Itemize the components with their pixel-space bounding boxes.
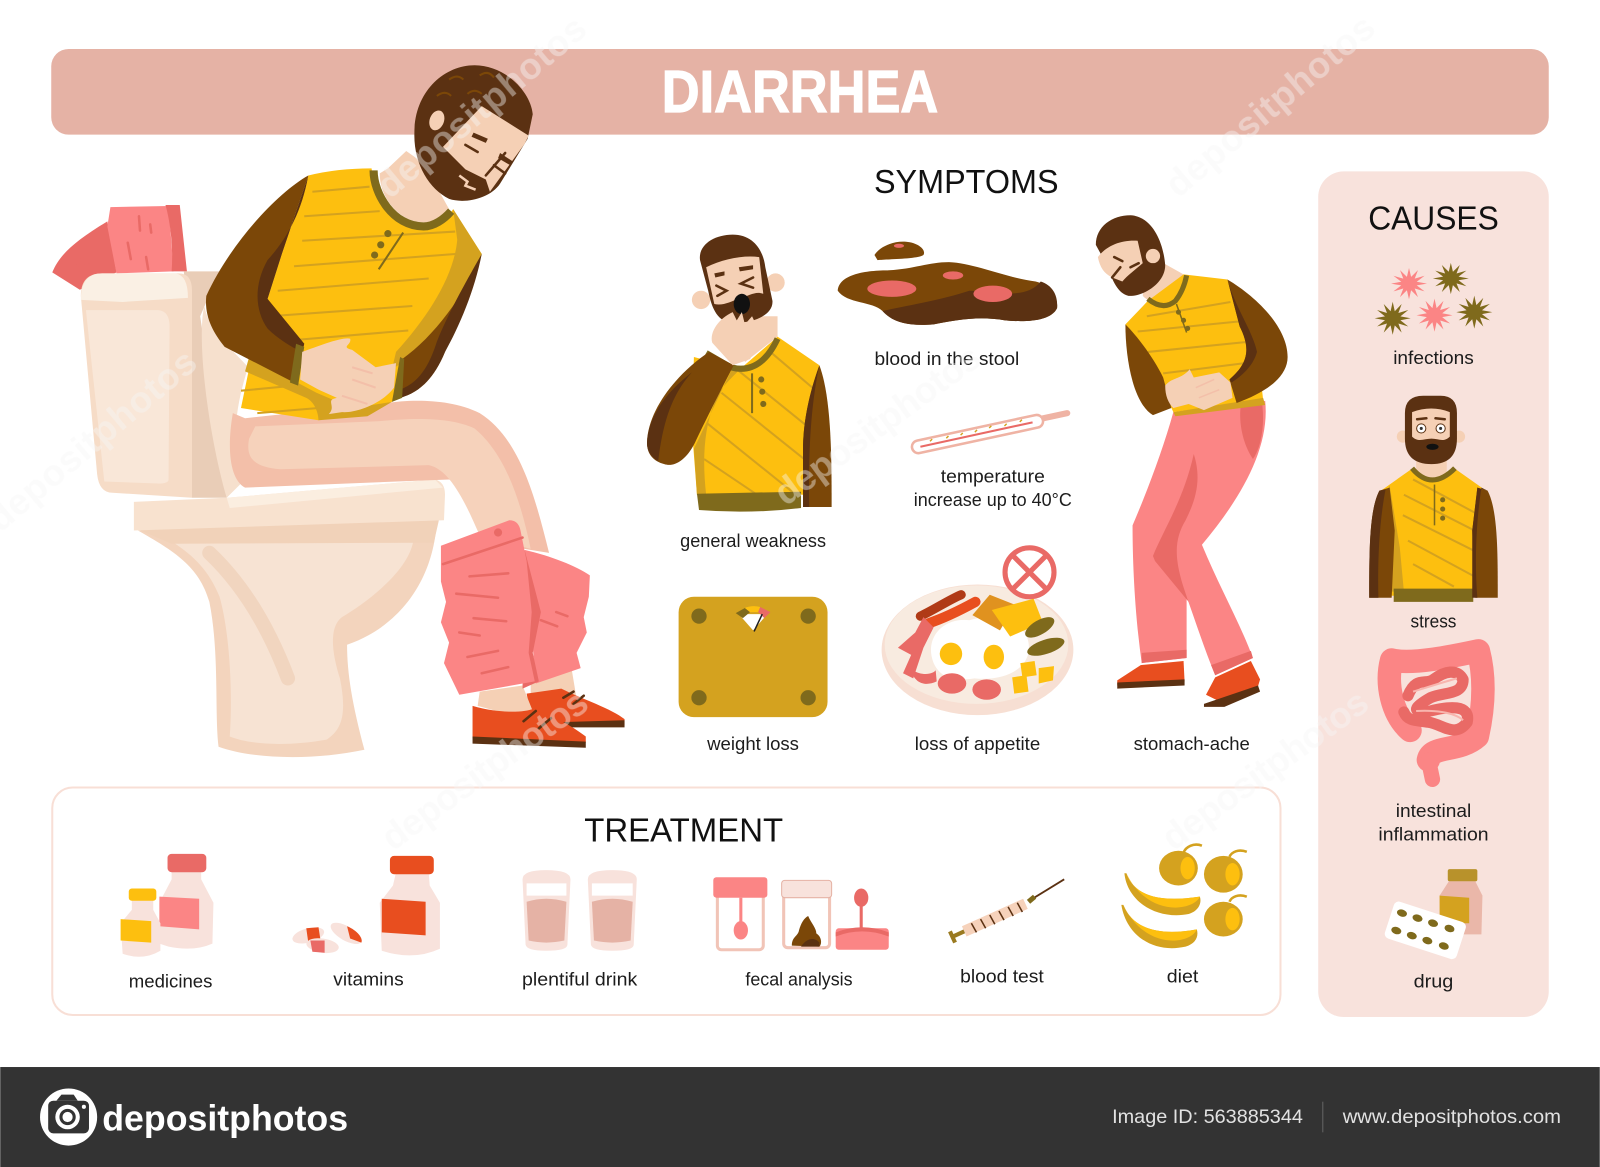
website: www.depositphotos.com [1342,1106,1561,1128]
label: infections: infections [1393,347,1474,368]
head [414,65,533,201]
title banner [51,49,1549,135]
heading: treatment: TREATMENT [584,813,783,850]
symptom: blood in the stool [838,242,1057,369]
torso with shirt [206,151,482,420]
brand name: depositphotos [102,1098,348,1138]
panel: causes [1318,171,1549,1017]
symptom: stomach-ache [1096,215,1288,754]
right sleeve [400,254,482,398]
stool icon [838,242,1057,325]
watermarks [0,6,1383,858]
icon: plentiful drink [523,870,637,951]
label: blood in the stool [874,348,1019,369]
illustration: man sitting on toilet [52,65,625,757]
watermarks: depositphotos [766,336,988,513]
watermarks: depositphotos [1154,681,1376,858]
title: DIARRHEA [662,58,938,125]
label: general weakness [680,530,826,551]
label: stomach-ache [1134,733,1250,754]
toilet paper roll [52,205,187,290]
scales icon [679,597,828,717]
left sleeve [206,175,308,383]
watermarks: depositphotos [369,7,594,206]
symptom: temperature [914,413,1072,510]
hand on stomach [300,338,396,414]
leg [230,401,549,553]
icon: diet [1121,845,1247,948]
label line 2: increase up to 40°C [914,489,1072,510]
image id: Image ID: 563885344 [1112,1106,1303,1128]
label: weight loss [706,733,799,754]
footer bar [0,1067,1600,1167]
label: medicines: medicines [129,970,212,991]
icon: syringe [950,879,1064,943]
icon: fecal analysis [713,877,889,950]
icon: intestines [1389,651,1483,779]
symptom: general weakness [647,235,832,551]
icon: medicines [121,854,213,957]
symptom: weight loss [679,597,828,754]
heading: symptoms: SYMPTOMS [874,164,1059,201]
label: drug: drug [1414,970,1453,991]
label: loss of appetite [915,733,1040,754]
panel: treatment [52,788,1280,1015]
icon: vitamins [291,856,440,955]
lowered trousers [441,520,590,695]
watermarks: depositphotos [1157,6,1383,205]
plate of food [882,548,1073,715]
label line 2: inflammation [1378,824,1489,845]
toilet [81,271,445,757]
label: diet: diet [1167,965,1199,986]
bent man [1096,215,1288,707]
label: blood test: blood test [960,965,1045,986]
label: plentiful drink: plentiful drink [522,968,638,989]
back shoe [527,668,625,727]
icon: camera logo [40,1088,97,1146]
no sign [1005,548,1054,597]
heading: causes: CAUSES [1368,201,1499,238]
symptom: loss of appetite [882,548,1073,754]
thermometer icon [918,413,1067,447]
label: stress: stress [1411,610,1456,631]
label: intestinal inflammation: intestinal [1396,800,1471,821]
coughing man [647,235,832,512]
label: vitamins: vitamins [333,968,404,989]
icon: drug [1383,869,1482,960]
label: temperature [941,466,1045,487]
front shoe [473,686,586,748]
icon: infections [1375,263,1492,335]
icon: stressed man [1369,396,1498,602]
watermarks: depositphotos [374,681,596,858]
label: fecal analysis: fecal analysis [745,968,853,989]
